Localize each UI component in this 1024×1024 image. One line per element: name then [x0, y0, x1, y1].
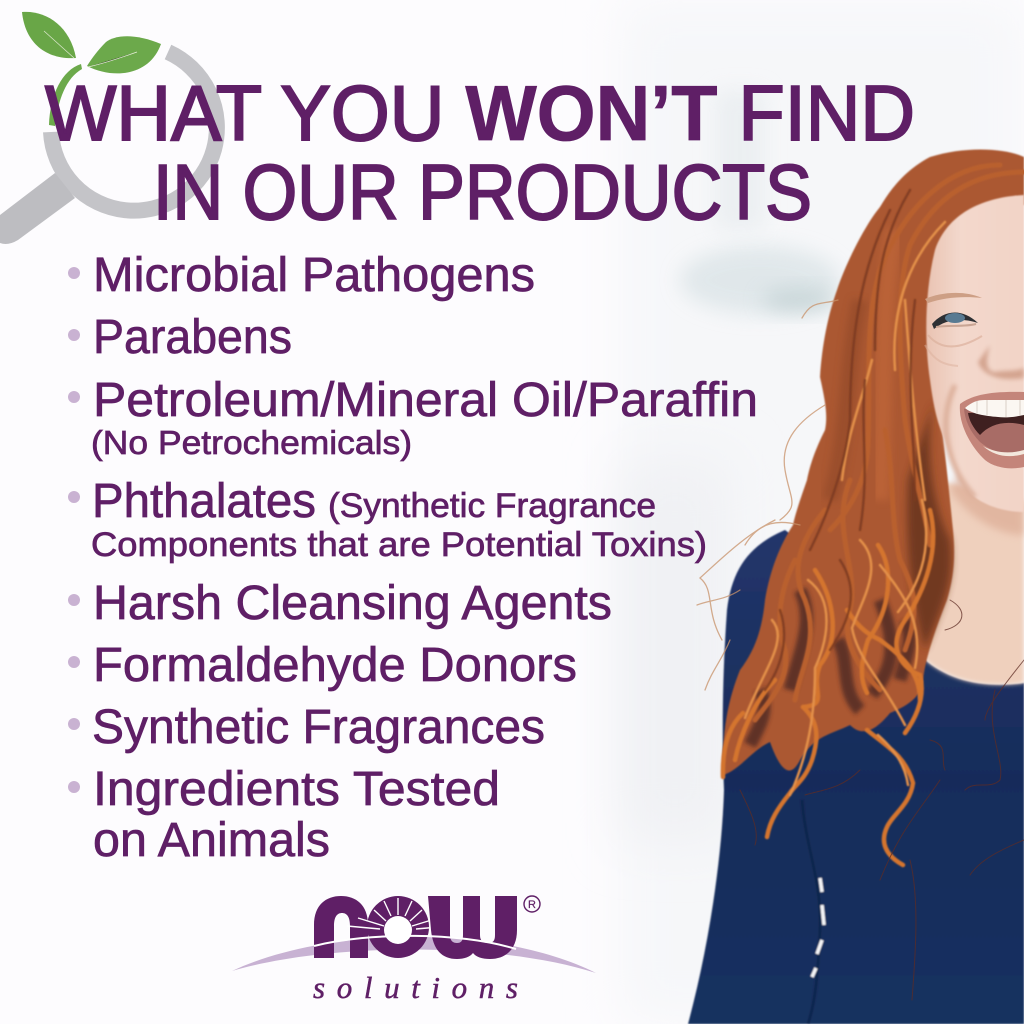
open mouth	[960, 392, 1024, 468]
logo sunburst o	[347, 896, 450, 958]
bullet: Petroleum: Petroleum/Mineral Oil/Paraffin	[93, 374, 758, 427]
bullet: Phthalates: Phthalates	[92, 475, 316, 528]
bullet: Phthalates: Components that are Potential Toxins)	[91, 526, 707, 564]
registered mark	[524, 896, 540, 912]
bullet: Synthetic Fragrances: Synthetic Fragrances	[92, 701, 545, 754]
logo letter w	[428, 896, 517, 959]
bullet: Ingredients Tested on Animals	[68, 763, 500, 867]
hair strands	[723, 165, 1024, 865]
loose wisps	[697, 300, 1024, 1000]
icon: green sprout	[22, 12, 161, 126]
navy long-sleeve top	[688, 530, 1024, 1024]
magnifying glass icon	[0, 52, 217, 244]
registered mark: R	[528, 899, 536, 911]
bullet: Parabens: Parabens	[93, 311, 292, 364]
eye and brow	[925, 293, 982, 366]
neck shadow	[950, 470, 1024, 535]
title	[45, 69, 915, 236]
neck	[923, 480, 1024, 685]
hair shadow	[907, 400, 951, 650]
bullet: Microbial Pathogens: Microbial Pathogens	[93, 249, 535, 302]
face	[926, 195, 1024, 512]
smile line	[946, 385, 975, 497]
bullet: Harsh Cleansing Agents: Harsh Cleansing Agents	[93, 577, 612, 630]
hair mass	[723, 149, 1024, 775]
bullet: Phthalates	[68, 475, 707, 564]
bullet: Petroleum: (No Petrochemicals)	[91, 424, 412, 461]
solutions wordmark: solutions	[313, 970, 518, 1005]
title: IN OUR PRODUCTS	[153, 148, 812, 236]
nose	[978, 345, 1024, 379]
logo white arc	[314, 936, 516, 949]
bullet: Ingredients Tested on Animals: on Animals	[93, 814, 330, 867]
logo swoosh	[232, 937, 596, 973]
bullet: Petroleum	[68, 374, 758, 461]
logo letter n	[314, 896, 368, 958]
logo: NOW solutions	[232, 896, 596, 1005]
woman photo illustration	[688, 149, 1024, 1024]
bullet: Formaldehyde Donors: Formaldehyde Donors	[93, 639, 577, 692]
title: WHAT YOU WON’T FIND	[45, 69, 915, 157]
bullet: Phthalates: (Synthetic Fragrance	[328, 487, 656, 525]
bullet: Ingredients Tested on Animals: Ingredients Tested	[93, 763, 500, 816]
list of excluded ingredients	[68, 249, 758, 867]
